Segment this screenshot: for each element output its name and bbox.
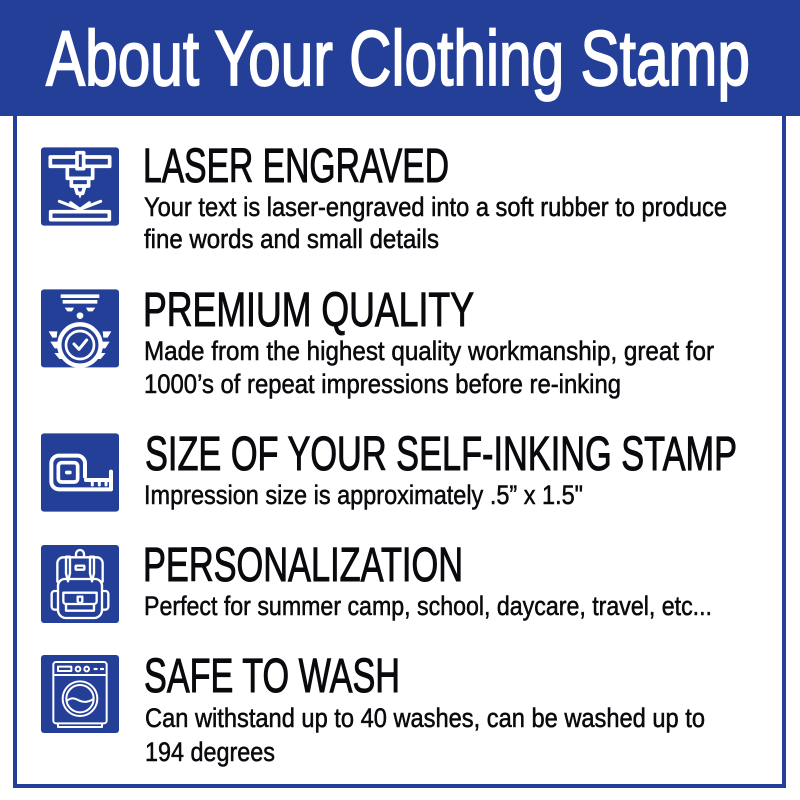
section: premium quality: 1000’s of repeat impressions before re-inking — [144, 369, 621, 399]
section: premium quality: PREMIUM QUALITY — [143, 284, 474, 337]
icon: tape measure — [41, 433, 119, 512]
section: laser engraved — [143, 140, 727, 254]
section: safe to wash: Can withstand up to 40 washes, can be washed up to — [145, 703, 705, 733]
section: safe to wash — [144, 650, 705, 767]
icon: laser engraver — [41, 147, 119, 226]
section: personalization: Perfect for summer camp, school, daycare, travel, etc... — [144, 591, 712, 621]
section: premium quality: Made from the highest quality workmanship, great for — [144, 336, 714, 366]
section: personalization — [143, 539, 712, 621]
icon: washing machine — [41, 655, 119, 733]
section: premium quality — [143, 284, 714, 399]
section: laser engraved: LASER ENGRAVED — [143, 140, 449, 193]
section: safe to wash: SAFE TO WASH — [144, 650, 400, 703]
section: laser engraved: Your text is laser-engraved into a soft rubber to produce — [144, 192, 727, 222]
section: personalization: PERSONALIZATION — [143, 539, 463, 592]
section: stamp size — [144, 428, 737, 510]
section: safe to wash: 194 degrees — [145, 737, 275, 767]
icon: medal — [41, 289, 119, 367]
icon: backpack — [41, 545, 119, 623]
section: stamp size: Impression size is approximately .5” x 1.5" — [144, 480, 583, 510]
section: laser engraved: fine words and small details — [144, 224, 439, 254]
